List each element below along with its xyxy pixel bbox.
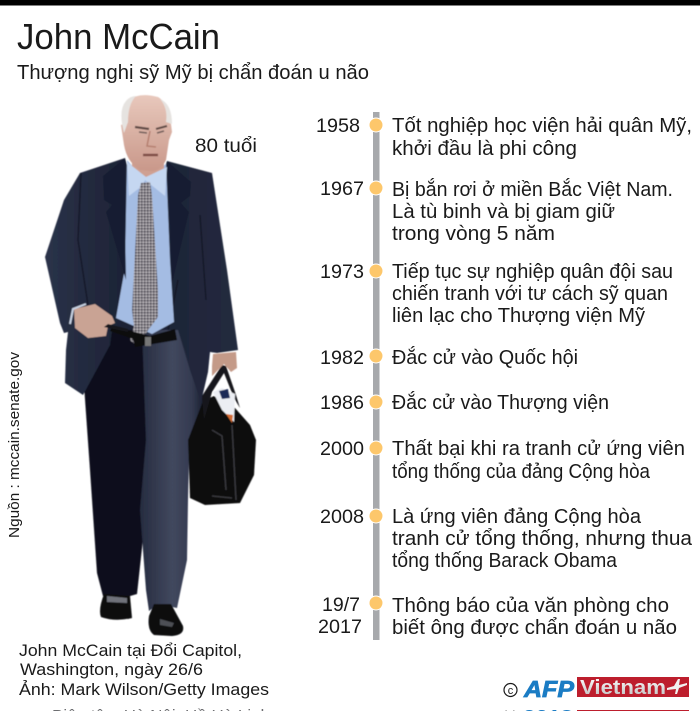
- timeline entry: 19/7 2017: [318, 594, 677, 639]
- photo caption: [19, 641, 269, 699]
- tie: [130, 182, 158, 346]
- timeline entry: 1982: 1982: [320, 347, 364, 369]
- belt: [110, 326, 177, 347]
- title: John McCain: [17, 16, 220, 57]
- cropped footer row: [52, 707, 689, 711]
- timeline entry: 1958: 1958: [316, 115, 360, 137]
- timeline entry: 1967: [320, 178, 673, 245]
- timeline entry: 1986: Đắc cử vào Thượng viện: [392, 391, 609, 414]
- photo caption: John McCain tại Đổi Capitol,: [19, 641, 242, 660]
- photo caption: Ảnh: Mark Wilson/Getty Images: [19, 680, 269, 699]
- belt buckle: [145, 337, 151, 346]
- timeline entry: 2000: Thất bại khi ra tranh cử ứng viên: [392, 437, 685, 460]
- timeline entry: 19/7 2017: biết ông được chẩn đoán u não: [392, 616, 677, 639]
- timeline entry: 1967: trong vòng 5 năm: [392, 222, 555, 245]
- timeline entry: 1967: 1967: [320, 178, 364, 200]
- timeline entry: 2000: tổng thống của đảng Cộng hòa: [392, 460, 651, 483]
- shirt collar: [127, 162, 167, 196]
- photo caption: Washington, ngày 26/6: [20, 660, 203, 679]
- logo: Vietnam+: [577, 677, 689, 699]
- timeline entry: 1973: liên lạc cho Thượng viện Mỹ: [392, 304, 646, 327]
- subtitle: Thượng nghị sỹ Mỹ bị chẩn đoán u não: [17, 62, 369, 84]
- right trouser leg: [140, 330, 205, 611]
- neck: [132, 160, 164, 180]
- logo: AFP: c: [508, 685, 514, 697]
- logo: AFP: AFP: [523, 676, 575, 702]
- bag: [188, 365, 256, 505]
- shoes: [100, 594, 183, 636]
- top black bar: [0, 0, 700, 6]
- photo: John McCain walking with a bag: [45, 95, 256, 636]
- age label: 80 tuổi: [195, 135, 257, 157]
- logo: AFP: [504, 676, 575, 702]
- timeline entry: 2008: [320, 505, 693, 572]
- shirt: [116, 160, 174, 334]
- timeline entry: 1973: [320, 260, 673, 327]
- timeline entry: 2008: Là ứng viên đảng Cộng hòa: [392, 505, 642, 528]
- logo: Vietnam+: Vietnam: [580, 677, 666, 699]
- timeline entry: 19/7 2017: 19/7: [322, 594, 360, 616]
- timeline entry: 1958: khởi đầu là phi công: [392, 137, 577, 160]
- timeline entry: 1986: 1986: [320, 392, 364, 414]
- lapels: [103, 158, 191, 284]
- timeline entry: 1973: chiến tranh với tư cách sỹ quan: [392, 282, 668, 305]
- timeline entry: 1967: Bị bắn rơi ở miền Bắc Việt Nam.: [392, 178, 673, 201]
- hand holding a phone: [70, 304, 128, 338]
- timeline entry: 2008: tranh cử tổng thống, nhưng thua: [392, 527, 693, 550]
- timeline axis: [373, 112, 380, 640]
- timeline entry: 1973: Tiếp tục sự nghiệp quân đội sau: [392, 260, 673, 283]
- timeline entry: 2008: tổng thống Barack Obama: [392, 549, 618, 572]
- timeline entry: 1958: [316, 114, 692, 160]
- timeline entry: 19/7 2017: 2017: [318, 616, 362, 638]
- head: [121, 95, 172, 171]
- hand on bag handle: [212, 352, 237, 376]
- timeline entry: 2008: 2008: [320, 506, 364, 528]
- timeline entry: 2000: [320, 437, 685, 483]
- timeline entry: 19/7 2017: Thông báo của văn phòng cho: [392, 594, 669, 617]
- timeline entry: 1982: Đắc cử vào Quốc hội: [392, 346, 578, 369]
- jacket creases: [78, 173, 206, 330]
- timeline entry: 2000: 2000: [320, 438, 364, 460]
- source, vertical: Nguồn : mccain.senate.gov: [6, 351, 23, 538]
- jacket: [45, 158, 238, 402]
- timeline entry: 1958: Tốt nghiệp học viện hải quân Mỹ,: [392, 114, 692, 137]
- timeline entry: 1973: 1973: [320, 261, 364, 283]
- left trouser leg: [84, 330, 150, 599]
- timeline entry: 1967: Là tù binh và bị giam giữ: [392, 200, 615, 223]
